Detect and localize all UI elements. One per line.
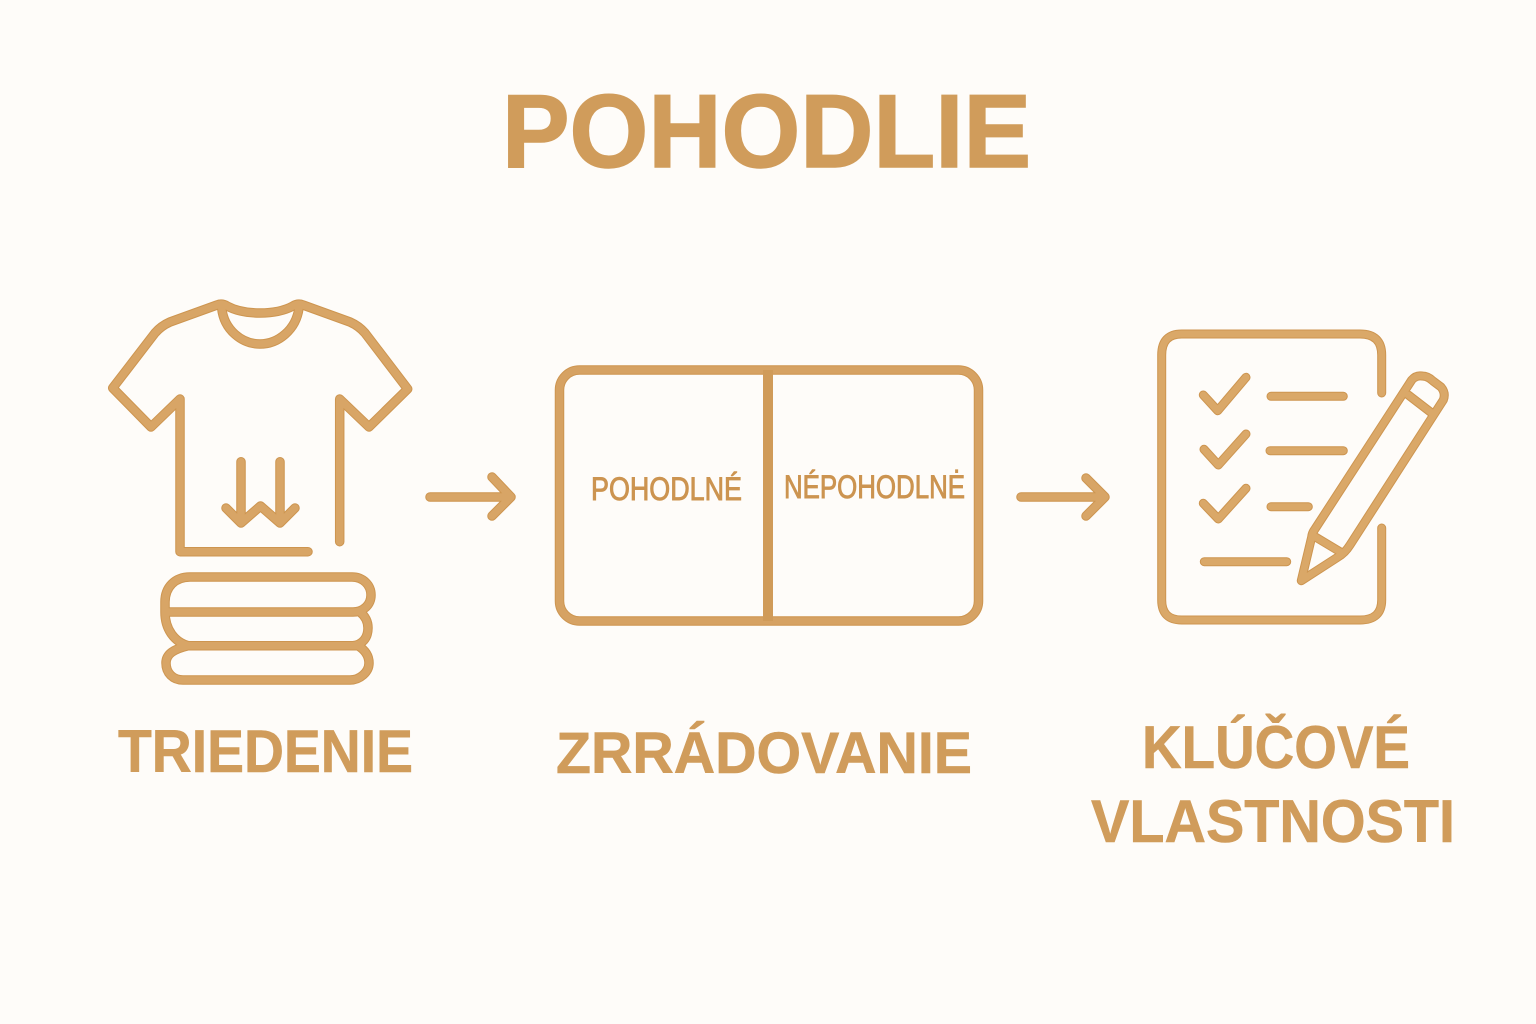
pencil bbox=[1301, 376, 1444, 581]
arrow: sorting to tidying bbox=[430, 477, 511, 516]
panel: two-column sorting board bbox=[560, 370, 978, 621]
t-shirt outline bbox=[113, 304, 408, 552]
double down arrows bbox=[226, 462, 295, 523]
label: key properties: KLÚČOVÉ bbox=[1142, 714, 1410, 781]
label: comfortable: POHODLNÉ bbox=[591, 471, 742, 507]
icon: t-shirt with down arrows and folded clothes bbox=[113, 304, 408, 680]
check marks bbox=[1203, 377, 1246, 519]
title: POHODLIE bbox=[502, 74, 1031, 190]
label: key properties: VLASTNOSTI bbox=[1091, 788, 1455, 855]
label: sorting: TRIEDENIE bbox=[118, 718, 413, 785]
icon: checklist with pencil bbox=[1162, 334, 1444, 620]
arrow: tidying to key properties bbox=[1021, 478, 1105, 516]
label: key properties bbox=[1091, 714, 1455, 855]
folded clothes stack bbox=[165, 577, 371, 680]
label: tidying: ZRRÁDOVANIE bbox=[556, 721, 972, 786]
document outline bbox=[1162, 334, 1382, 620]
list lines bbox=[1204, 396, 1343, 562]
label: uncomfortable: NÉPOHODLNĖ bbox=[784, 469, 965, 505]
